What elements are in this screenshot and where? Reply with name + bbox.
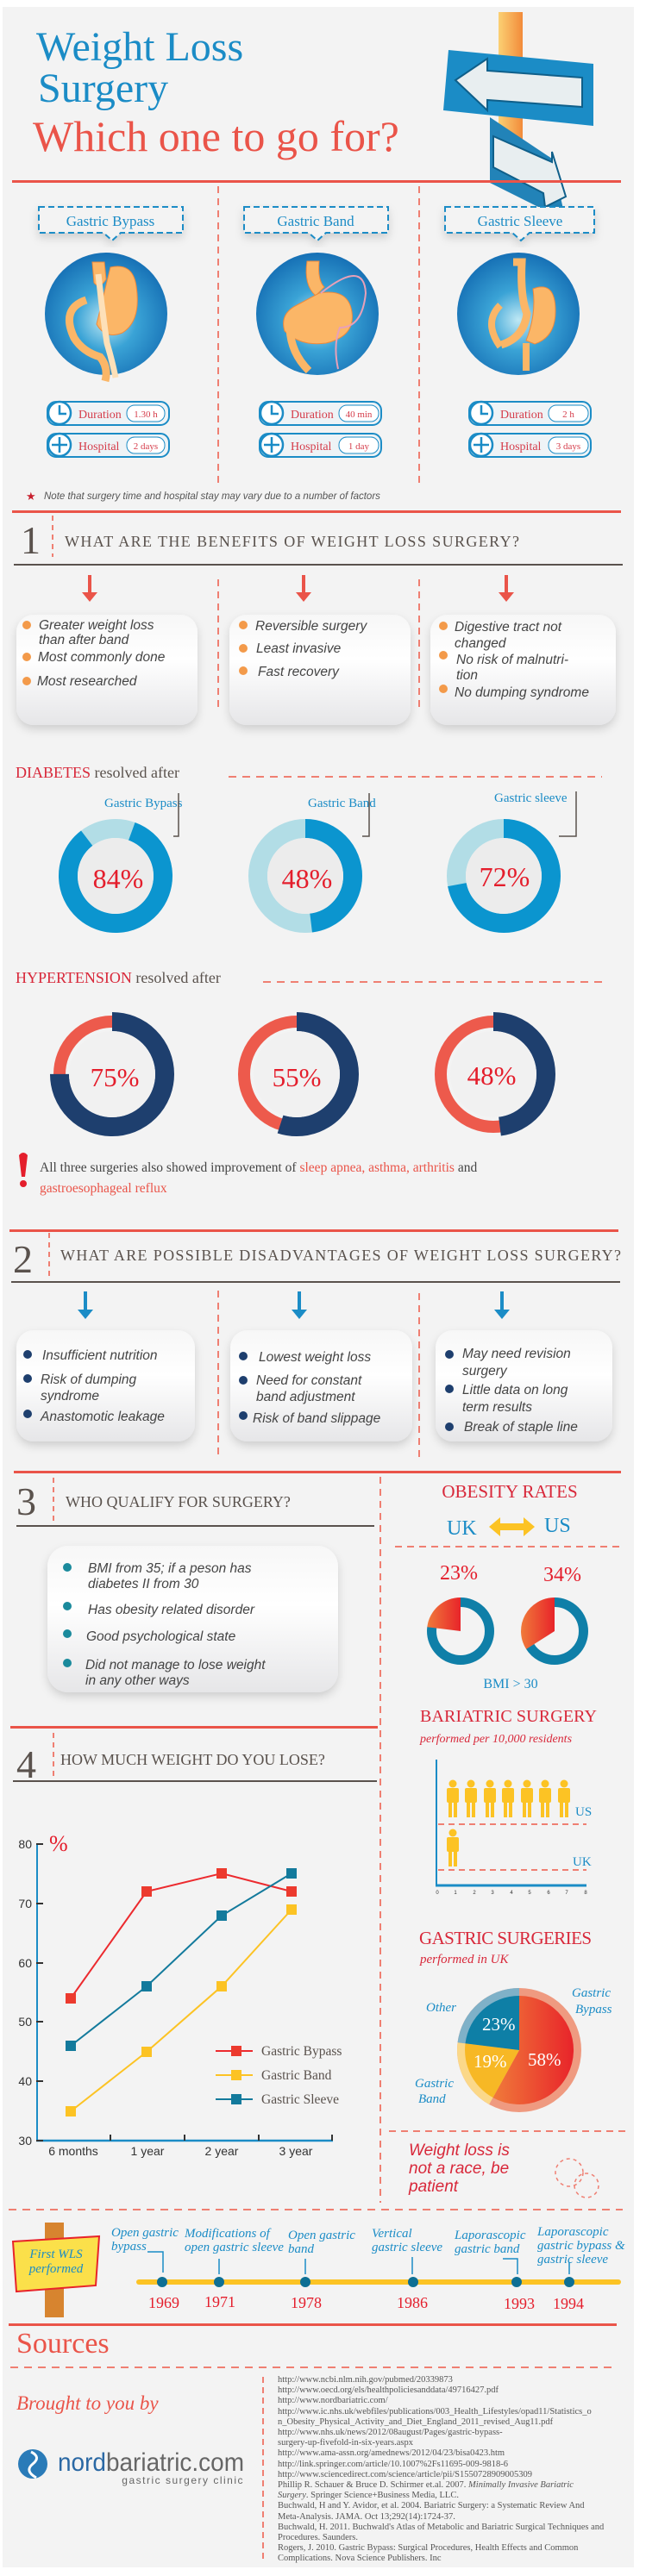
panel: gastric sleeve	[445, 207, 594, 457]
panel: disadvantages band: Risk of band slippage	[253, 1411, 381, 1426]
chart: bariatric people: UK	[573, 1855, 592, 1869]
icon: stomach oval	[45, 253, 167, 381]
chart: hypertension donuts: 48%	[467, 1060, 516, 1091]
chart: diabetes donuts: 48%	[282, 863, 332, 894]
panel: qualify: in any other ways	[85, 1673, 190, 1688]
panel: benefits bypass: Greater weight loss	[39, 618, 154, 633]
panel: disadvantages band: Need for constant	[256, 1373, 362, 1388]
duration pill	[260, 402, 381, 425]
panel: disadvantages sleeve	[436, 1330, 612, 1441]
duration pill: 1.30 h	[134, 410, 158, 420]
heading: section 2: 2	[13, 1237, 33, 1281]
duration pill	[469, 402, 591, 425]
duration pill	[47, 402, 169, 425]
chart: hypertension donuts	[60, 1022, 546, 1127]
chart: weight loss lines: 3 year	[279, 2144, 313, 2158]
heading: bariatric surgery: BARIATRIC SURGERY	[420, 1707, 597, 1726]
panel: disadvantages bypass: Anastomotic leakage	[40, 1410, 165, 1424]
heading: section 4: HOW MUCH WEIGHT DO YOU LOSE?	[60, 1751, 325, 1768]
timeline: bypass	[111, 2240, 147, 2254]
chart: gastric pie: 19%	[474, 2051, 507, 2072]
heading: section 3: WHO QUALIFY FOR SURGERY?	[66, 1493, 291, 1510]
text: references: Rogers, J. 2010. Gastric Bypass: Surgical Procedures, Health Effects and Common	[278, 2543, 579, 2553]
panel: benefits bypass: than after band	[39, 633, 130, 647]
panel: disadvantages sleeve: May need revision	[462, 1347, 571, 1361]
text: references: http://www.nordbariatric.com/	[278, 2396, 388, 2405]
panel: benefits sleeve	[430, 615, 616, 725]
chart: weight loss lines: 6 months	[48, 2144, 98, 2158]
text: references: Complications. Nova Science Publishers. Inc	[278, 2554, 442, 2563]
heading: section 4: 4	[16, 1742, 36, 1786]
timeline: 1994	[553, 2295, 584, 2312]
duration pill: Duration	[291, 409, 334, 422]
label bubble: Gastric Sleeve	[478, 213, 562, 229]
chart: bariatric people: 7	[565, 1891, 568, 1896]
heading: obesity rates: UK	[447, 1517, 477, 1540]
panel: disadvantages band: band adjustment	[256, 1390, 355, 1404]
panel: qualify: Has obesity related disorder	[88, 1603, 255, 1617]
chart: weight loss lines: %	[49, 1831, 68, 1856]
label bubble	[445, 207, 594, 241]
panel: disadvantages sleeve: term results	[462, 1400, 532, 1415]
timeline: 1993	[504, 2295, 535, 2312]
panel: qualify: BMI from 35; if a peson has	[88, 1561, 252, 1576]
panel: disadvantages bypass: Risk of dumping	[41, 1372, 137, 1387]
hospital pill: 2 days	[134, 441, 158, 452]
icon: first WLS signpost: First WLS	[28, 2248, 83, 2261]
chart: weight loss lines: 30	[18, 2134, 32, 2148]
panel: benefits sleeve: No risk of malnutri-	[456, 653, 568, 667]
panel: benefits bypass	[16, 615, 198, 725]
panel: gastric bypass	[39, 207, 183, 457]
chart: gastric pie: Gastric	[415, 2077, 454, 2091]
divider red	[12, 180, 621, 183]
chart: hypertension donuts: 55%	[273, 1062, 321, 1092]
panel: disadvantages bypass: Insufficient nutrition	[42, 1348, 158, 1363]
timeline: band	[288, 2242, 314, 2256]
panel: benefits sleeve: changed	[455, 636, 507, 651]
chart: bariatric people: 2	[473, 1891, 476, 1896]
label bubble	[244, 207, 388, 241]
chart: bariatric people: US	[575, 1805, 592, 1819]
chart: obesity pies: 23%	[440, 1562, 478, 1585]
panel: benefits sleeve: No dumping syndrome	[455, 685, 589, 700]
text: references: Surgery. Springer Science+Business Media, LLC.	[278, 2491, 459, 2500]
chart: bariatric people: 6	[547, 1891, 550, 1896]
timeline	[13, 2223, 625, 2317]
legend	[216, 2044, 342, 2107]
icon: stomach oval	[457, 253, 580, 375]
panel: disadvantages sleeve: surgery	[462, 1364, 508, 1379]
chart: gastric pie	[415, 1986, 612, 2112]
heading: hypertension: HYPERTENSION resolved after	[16, 969, 221, 986]
timeline: Open gastric	[288, 2229, 355, 2242]
panel: benefits band: Reversible surgery	[255, 619, 367, 634]
chart: bariatric people: 5	[528, 1891, 531, 1896]
text: references: http://www.ic.nhs.uk/webfiles/publications/003_Health_Lifestyles/opad11/Statistics_o	[278, 2407, 592, 2417]
chart: weight loss lines: 80	[18, 1837, 32, 1851]
heading: obesity rates	[442, 1481, 578, 1540]
panel: benefits bypass: Most researched	[37, 674, 138, 689]
hospital pill: 3 days	[556, 441, 580, 452]
heading: section 3: 3	[16, 1479, 36, 1523]
heading: section 4	[16, 1733, 325, 1786]
callout: other improvements: All three surgeries also showed improvement of sleep apnea, asthma, arthritis and	[40, 1160, 477, 1175]
timeline: Laporascopic	[536, 2225, 609, 2239]
duration pill: 2 h	[562, 410, 574, 420]
icon: stomach oval	[256, 253, 379, 375]
chart: gastric pie: 58%	[528, 2049, 561, 2070]
duration pill: Duration	[500, 409, 543, 422]
arrows: disadvantages	[78, 1291, 510, 1319]
timeline: 1986	[397, 2294, 428, 2311]
hospital pill: Hospital	[291, 441, 332, 453]
chart: hypertension donuts: 75%	[91, 1062, 139, 1092]
label bubble	[39, 207, 183, 241]
timeline: 1969	[148, 2294, 179, 2311]
panel: disadvantages sleeve: Break of staple line	[464, 1420, 578, 1435]
chart: weight loss lines	[18, 1831, 342, 2158]
duration pill: 40 min	[346, 410, 373, 420]
heading: gastric surgeries: performed in UK	[419, 1953, 509, 1966]
chart: obesity pies	[427, 1562, 583, 1691]
icon: first WLS signpost: performed	[28, 2262, 84, 2276]
timeline: gastric bypass &	[537, 2239, 625, 2253]
text: references: http://www.ama-assn.org/amednews/2012/04/23/bisa0423.htm	[278, 2448, 505, 2458]
chart: weight loss lines: 2 year	[205, 2144, 239, 2158]
chart: weight loss lines: 1 year	[131, 2144, 165, 2158]
chart: bariatric people: 1	[454, 1891, 457, 1896]
heading: diabetes: DIABETES resolved after	[16, 764, 179, 781]
panel: disadvantages bypass	[16, 1330, 195, 1441]
panel: disadvantages bypass: syndrome	[41, 1389, 99, 1404]
text: references: http://www.ncbi.nlm.nih.gov/pubmed/20339873	[278, 2375, 453, 2385]
heading: sources: Sources	[16, 2328, 110, 2360]
chart: bariatric people: 8	[584, 1891, 587, 1896]
timeline: Vertical	[372, 2227, 412, 2241]
panel: disadvantages band	[230, 1330, 412, 1441]
heading: gastric surgeries: GASTRIC SURGERIES	[419, 1928, 592, 1948]
title: Which one to go for?	[33, 112, 399, 160]
panel: benefits sleeve: tion	[456, 668, 478, 683]
text: brought to you by: Brought to you by	[16, 2392, 159, 2414]
callout: weight loss is not a race: patient	[408, 2178, 459, 2196]
chart: weight loss lines: 60	[18, 1956, 32, 1970]
text: references: Meta-Analysis. JAMA. Oct 13;292(14):1724-37.	[278, 2512, 455, 2522]
hospital pill: Hospital	[78, 441, 120, 453]
arrows: benefits	[82, 575, 514, 602]
heading: section 3	[16, 1478, 291, 1523]
heading: section 2	[13, 1233, 621, 1281]
chart: weight loss lines: 70	[18, 1897, 32, 1910]
panel: benefits band: Least invasive	[256, 641, 342, 656]
text: references: n_Obesity_Physical_Activity_and_Diet_England_2011_revised_Aug11.pdf	[278, 2417, 554, 2427]
chart: diabetes donuts: 84%	[93, 863, 143, 894]
panel: qualify: Good psychological state	[86, 1629, 236, 1644]
note: Note that surgery time and hospital stay may vary due to a number of factors	[44, 491, 380, 502]
text: references: http://www.nhs.uk/news/2012/08august/Pages/gastric-bypass-	[278, 2428, 503, 2437]
duration pill: Duration	[78, 409, 122, 422]
panel: disadvantages band: Lowest weight loss	[259, 1350, 371, 1365]
heading: gastric surgeries	[419, 1928, 592, 1966]
text: references: surgery-up-fivefold-in-six-years.aspx	[278, 2438, 414, 2448]
chart: gastric pie: Other	[426, 2001, 456, 2015]
panel: benefits bypass: Most commonly done	[38, 650, 166, 665]
title: Weight Loss	[36, 24, 243, 70]
chart: bariatric people: 0	[436, 1891, 439, 1896]
text: references: http://www.sciencedirect.com/science/article/pii/S1550728909005309	[278, 2470, 532, 2479]
chart: gastric pie: Band	[418, 2092, 446, 2106]
chart: weight loss lines: 50	[18, 2015, 32, 2029]
hospital pill	[260, 434, 381, 457]
chart: bariatric people: 3	[491, 1891, 494, 1896]
icon: signpost	[443, 12, 593, 221]
heading: obesity rates: US	[544, 1515, 571, 1537]
callout: weight loss is not a race	[408, 2141, 510, 2196]
logo: nordbariatric: nordbariatric.com	[58, 2448, 244, 2477]
text: references: Phillip R. Schauer & Bruce D. Schirmer et.al. 2007. Minimally Invasive Bariatric	[278, 2480, 574, 2490]
chart: gastric pie: Gastric	[572, 1986, 611, 2000]
hospital pill	[469, 434, 591, 457]
note: ★	[26, 490, 36, 503]
heading: obesity rates: OBESITY RATES	[442, 1481, 578, 1502]
logo: nordbariatric	[18, 2448, 244, 2486]
timeline: 1978	[291, 2294, 322, 2311]
label bubble: Gastric Bypass	[66, 213, 154, 229]
chart: weight loss lines: 40	[18, 2074, 32, 2088]
chart: gastric pie: Bypass	[575, 2003, 612, 2016]
icon: dashed shape	[555, 2159, 599, 2198]
chart: bariatric people: 4	[510, 1891, 513, 1896]
timeline: gastric sleeve	[537, 2253, 608, 2267]
panel: qualify: diabetes II from 30	[88, 1577, 199, 1591]
panel: benefits band	[229, 615, 411, 725]
heading: bariatric surgery	[419, 1707, 597, 1746]
title: Surgery	[38, 66, 168, 111]
heading: section 1: WHAT ARE THE BENEFITS OF WEIGHT LOSS SURGERY?	[65, 533, 519, 550]
icon: first WLS signpost	[13, 2223, 99, 2317]
chart: diabetes donuts: Gastric sleeve	[494, 791, 568, 805]
chart: obesity pies: BMI > 30	[483, 1677, 538, 1691]
callout: other improvements	[19, 1153, 477, 1196]
timeline: Open gastric	[111, 2226, 179, 2240]
timeline: 1971	[204, 2293, 235, 2310]
timeline: Modifications of	[184, 2227, 272, 2241]
timeline: gastric band	[455, 2242, 520, 2256]
text: references	[278, 2375, 605, 2563]
text: references: http://www.oecd.org/els/healthpoliciesanddata/49716427.pdf	[278, 2385, 499, 2395]
callout: weight loss is not a race: Weight loss is	[409, 2141, 510, 2160]
timeline: Laporascopic	[454, 2229, 526, 2242]
legend: Gastric Sleeve	[261, 2092, 339, 2107]
chart: diabetes donuts: Gastric Band	[308, 797, 376, 810]
panel: benefits sleeve: Digestive tract not	[455, 620, 562, 635]
heading: section 1	[21, 516, 519, 562]
legend: Gastric Bypass	[261, 2044, 342, 2059]
logo: nordbariatric: gastric surgery clinic	[122, 2474, 244, 2486]
callout: weight loss is not a race: not a race, be	[409, 2160, 509, 2178]
chart: gastric pie: 23%	[482, 2014, 516, 2035]
callout: other improvements: gastroesophageal reflux	[40, 1181, 167, 1196]
panel: qualify	[47, 1546, 338, 1692]
chart: diabetes donuts	[55, 791, 576, 936]
panel: disadvantages sleeve: Little data on long	[462, 1383, 568, 1397]
heading: section 1: 1	[21, 518, 41, 562]
text: references: Buchwald, H and Y. Avidor, et al. 2004. Bariatric Surgery: a Systematic Review And	[278, 2501, 585, 2510]
icon: double arrow	[489, 1517, 535, 1536]
chart: diabetes donuts: Gastric Bypass	[104, 797, 183, 810]
hospital pill: 1 day	[348, 441, 370, 452]
legend: Gastric Band	[261, 2068, 332, 2083]
heading: bariatric surgery: performed per 10,000 residents	[419, 1733, 573, 1746]
hospital pill: Hospital	[500, 441, 542, 453]
heading: section 2: WHAT ARE POSSIBLE DISADVANTAGES OF WEIGHT LOSS SURGERY?	[60, 1247, 621, 1264]
panel: gastric band	[244, 207, 388, 457]
chart: obesity pies: 34%	[543, 1564, 581, 1586]
text: references: http://link.springer.com/article/10.1007%2Fs11695-009-9818-6	[278, 2460, 508, 2469]
timeline: open gastric sleeve	[185, 2241, 284, 2254]
chart: diabetes donuts: 72%	[480, 861, 530, 892]
hospital pill	[47, 434, 169, 457]
chart: bariatric people	[436, 1760, 592, 1896]
label bubble: Gastric Band	[277, 213, 354, 229]
panel: qualify: Did not manage to lose weight	[85, 1658, 266, 1673]
text: references: Buchwald, H. 2011. Buchwald's Atlas of Metabolic and Bariatric Surgical Techniques and	[278, 2523, 605, 2532]
text: references: Procedures. Saunders.	[278, 2533, 358, 2542]
timeline: gastric sleeve	[372, 2241, 442, 2254]
panel: benefits band: Fast recovery	[258, 665, 340, 679]
title	[33, 24, 399, 160]
